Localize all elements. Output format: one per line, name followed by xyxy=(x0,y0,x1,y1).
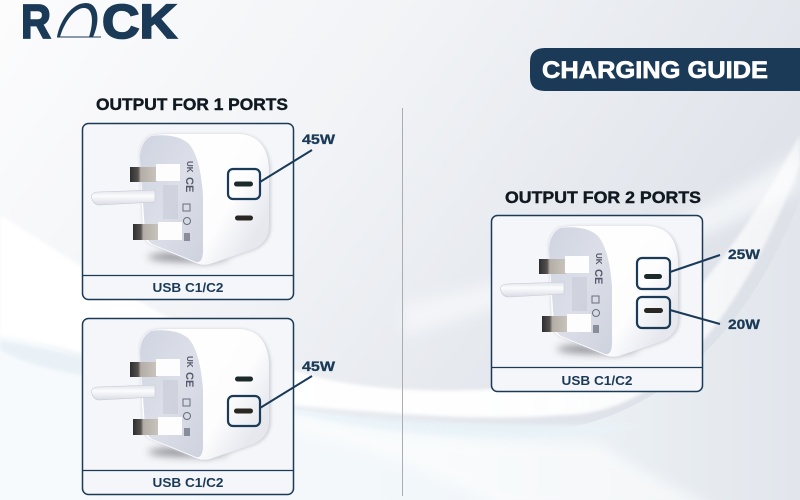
connector line xyxy=(260,150,312,182)
heading: output for 1 port: OUTPUT FOR 1 PORTS xyxy=(96,96,288,114)
center divider xyxy=(402,108,404,496)
port highlight xyxy=(228,396,260,426)
panel: 1 port, upper USB highlighted xyxy=(82,124,336,300)
power label: 20W: 20W xyxy=(728,316,761,332)
connector line xyxy=(260,376,312,408)
connector line: top xyxy=(670,255,720,272)
header: charging guide xyxy=(530,48,800,91)
power label: 45W xyxy=(302,358,336,374)
heading: output for 2 ports: OUTPUT FOR 2 PORTS xyxy=(505,189,701,207)
connector line: bottom xyxy=(670,310,720,324)
power label: 45W xyxy=(302,131,336,147)
charger image xyxy=(92,134,271,266)
header: charging guide: CHARGING GUIDE xyxy=(542,57,768,84)
power label: 25W: 25W xyxy=(728,246,761,262)
panel: 1 port, lower USB highlighted xyxy=(82,318,336,494)
logo xyxy=(21,0,177,49)
caption: USB C1/C2 xyxy=(152,475,224,490)
caption: USB C1/C2 xyxy=(152,280,224,295)
caption: USB C1/C2 xyxy=(562,373,632,388)
port highlight: top xyxy=(637,258,670,289)
panel: 2 ports xyxy=(492,216,761,392)
charger image xyxy=(92,329,271,461)
port highlight xyxy=(228,169,260,199)
port highlight: bottom xyxy=(637,297,670,328)
charger image xyxy=(501,226,680,358)
